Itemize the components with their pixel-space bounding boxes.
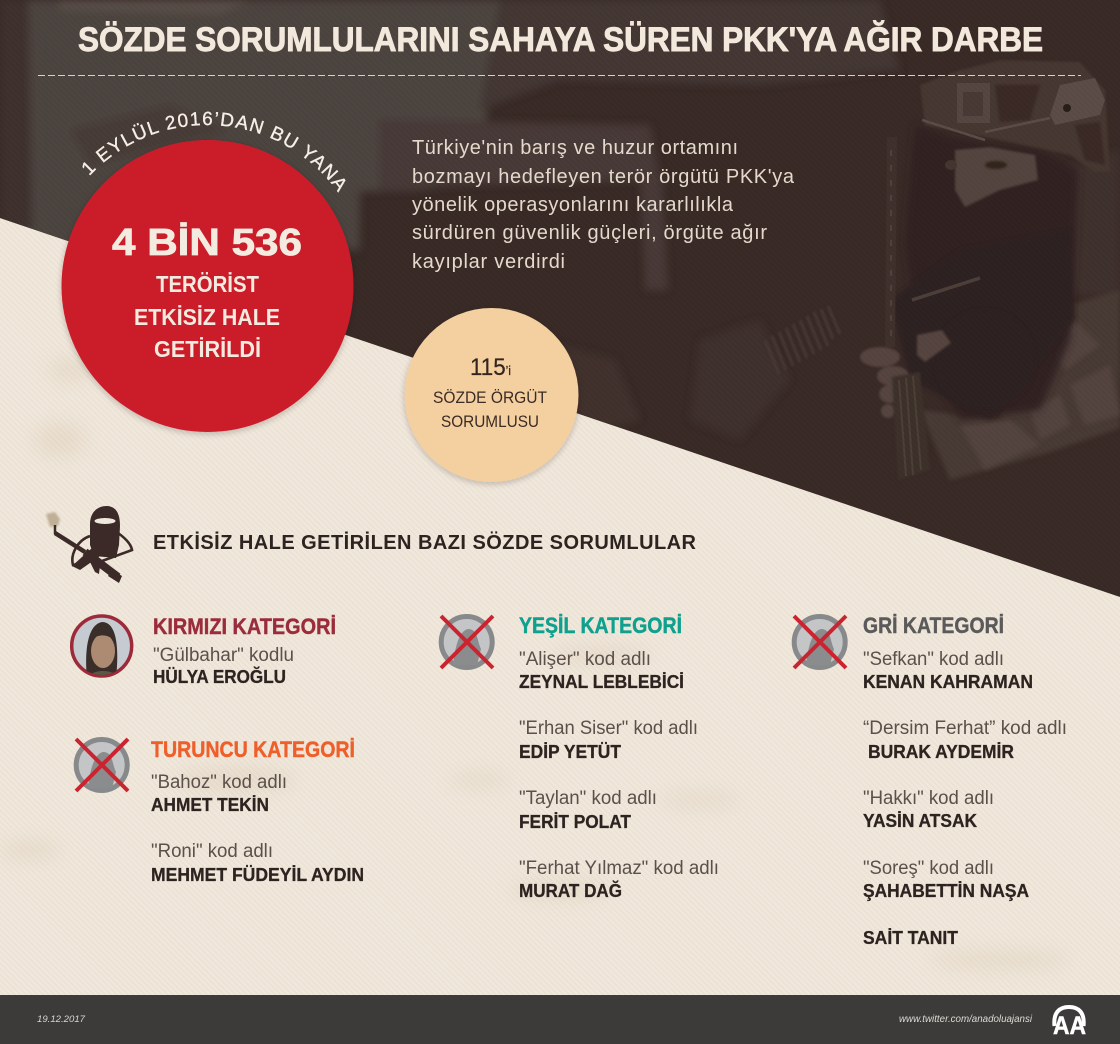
entry: KENAN KAHRAMAN xyxy=(863,671,1033,692)
entry: "Taylan" kod adlı xyxy=(519,788,657,809)
intro paragraph: bozmayı hedefleyen terör örgütü PKK'ya xyxy=(412,166,795,188)
panel: grey category xyxy=(794,613,1067,948)
panel: orange category xyxy=(76,737,364,885)
peach circle caption xyxy=(433,388,547,431)
entry xyxy=(519,858,719,901)
intro paragraph: kayıplar verdirdi xyxy=(412,251,565,273)
icon: crossed-out unknown portrait xyxy=(76,739,128,791)
entry: "Alişer" kod adlı xyxy=(519,649,651,670)
entry xyxy=(153,645,294,687)
title: SÖZDE SORUMLULARINI SAHAYA SÜREN PKK'YA AĞIR DARBE xyxy=(78,21,1043,59)
red circle caption: ETKİSİZ HALE xyxy=(134,304,280,330)
entry: EDİP YETÜT xyxy=(519,741,622,762)
callout: red circle with total xyxy=(58,112,354,437)
entry: "Erhan Siser" kod adlı xyxy=(519,718,698,739)
entry: ZEYNAL LEBLEBİCİ xyxy=(519,671,684,692)
heading: TURUNCU KATEGORİ xyxy=(151,737,355,762)
entry xyxy=(151,772,287,815)
portrait: Hülya Eroğlu xyxy=(72,616,132,680)
red circle caption: GETİRİLDİ xyxy=(154,336,261,362)
heading: KIRMIZI KATEGORİ xyxy=(153,614,336,639)
section heading: ETKİSİZ HALE GETİRİLEN BAZI SÖZDE SORUMLULAR xyxy=(153,531,697,554)
panel: red category xyxy=(72,614,336,687)
entry: MURAT DAĞ xyxy=(519,880,622,901)
entry: MEHMET FÜDEYİL AYDIN xyxy=(151,864,364,885)
intro paragraph xyxy=(412,137,795,273)
entry: BURAK AYDEMİR xyxy=(868,741,1014,762)
big number: 4 BİN 536 xyxy=(112,222,302,264)
peach circle caption: SÖZDE ÖRGÜT xyxy=(433,388,547,407)
entry: “Dersim Ferhat” kod adlı xyxy=(863,718,1067,739)
entry xyxy=(863,649,1033,692)
entry xyxy=(519,649,684,692)
entry: "Bahoz" kod adlı xyxy=(151,772,287,793)
intro paragraph: yönelik operasyonlarını kararlılıkla xyxy=(412,194,734,216)
background photo: wall and interior xyxy=(0,0,900,440)
peach circle caption: SORUMLUSU xyxy=(441,412,539,431)
icon: masked militant with rifle xyxy=(46,506,132,583)
entry xyxy=(519,788,657,832)
heading: YEŞİL KATEGORİ xyxy=(519,613,682,638)
entry: HÜLYA EROĞLU xyxy=(153,666,286,687)
date: 19.12.2017 xyxy=(37,1014,86,1025)
entry: SAİT TANIT xyxy=(863,927,959,948)
soldier figure xyxy=(765,60,1120,480)
logo: Anadolu Agency: AA xyxy=(1053,1012,1086,1040)
entry xyxy=(863,718,1067,762)
entry: "Roni" kod adlı xyxy=(151,841,273,862)
entry xyxy=(519,718,698,762)
entry: "Soreş" kod adlı xyxy=(863,858,994,879)
entry xyxy=(863,788,994,831)
red circle caption: TERÖRİST xyxy=(156,271,259,297)
entry: "Hakkı" kod adlı xyxy=(863,788,994,809)
intro paragraph: Türkiye'nin barış ve huzur ortamını xyxy=(412,137,738,159)
intro paragraph: sürdüren güvenlik güçleri, örgüte ağır xyxy=(412,222,767,244)
footer bar xyxy=(0,995,1120,1044)
entry: FERİT POLAT xyxy=(519,811,632,832)
entry: AHMET TEKİN xyxy=(151,794,269,815)
entry: "Gülbahar" kodlu xyxy=(153,645,294,666)
callout: peach circle xyxy=(404,308,578,482)
red circle caption xyxy=(134,271,280,362)
curved date label: 1 EYLÜL 2016’DAN BU YANA xyxy=(82,112,346,193)
entry: "Ferhat Yılmaz" kod adlı xyxy=(519,858,719,879)
entry xyxy=(863,858,1029,901)
entry: ŞAHABETTİN NAŞA xyxy=(863,880,1029,901)
entry xyxy=(151,841,364,885)
twitter address: www.twitter.com/anadoluajansi xyxy=(899,1013,1033,1025)
heading: GRİ KATEGORİ xyxy=(863,613,1004,638)
icon: crossed-out unknown portrait xyxy=(794,616,846,668)
entry: YASİN ATSAK xyxy=(863,810,978,831)
entry: "Sefkan" kod adlı xyxy=(863,649,1004,670)
panel: green category xyxy=(441,613,719,901)
icon: crossed-out unknown portrait xyxy=(441,616,493,668)
count: 115’i xyxy=(470,354,511,381)
background: dark photo band with soldier xyxy=(0,0,1120,600)
